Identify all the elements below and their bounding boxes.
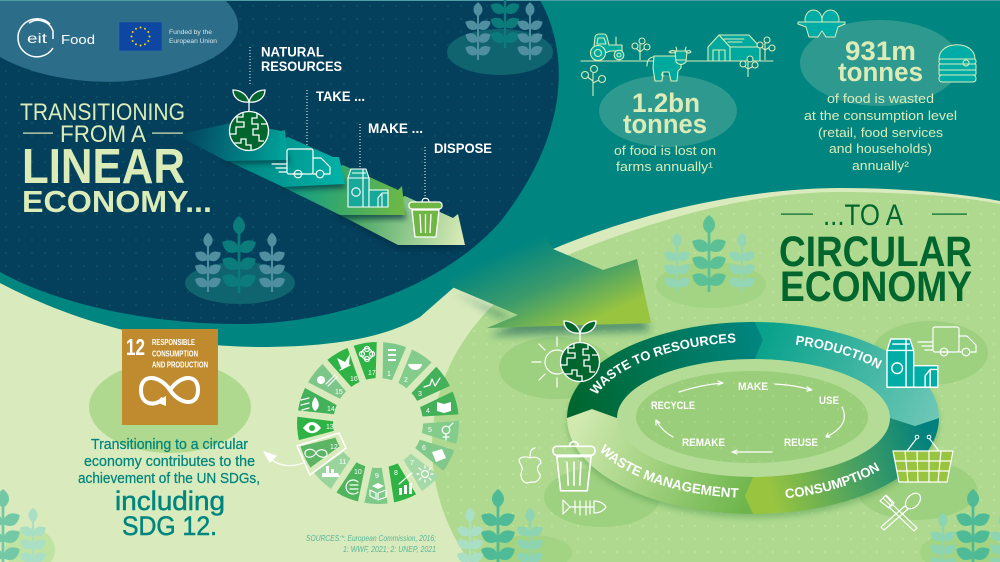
segment 3 — [283, 165, 407, 219]
logo: EIT Food: Food — [61, 33, 95, 47]
stat: 1.2bn tonnes: of food is lost on — [614, 143, 716, 158]
text: sources: 1: WWF, 2021; 2: UNEP, 2021 — [343, 544, 436, 554]
icon: basket — [893, 435, 953, 482]
wedge 11: 11 — [339, 459, 346, 466]
label: consumption: CONSUMPTION — [786, 462, 880, 498]
wedge 10 — [336, 460, 372, 502]
icon: fork and spoon — [880, 490, 923, 531]
tractor — [590, 34, 624, 60]
labels: natural resources, take, make, dispose — [261, 44, 492, 156]
wedge 11 — [314, 447, 356, 490]
stat: 931m tonnes: at the consumption level — [804, 108, 957, 123]
plants: bottom left — [0, 489, 55, 562]
wedge 3 — [408, 366, 451, 406]
logo: EU flag — [119, 22, 162, 51]
wedge 13: 13 — [326, 424, 334, 431]
wedge 7: 7 — [410, 460, 414, 467]
title: transitioning from a linear economy: TRANSITIONING — [20, 99, 185, 126]
wedge 5 — [421, 417, 460, 444]
stat: 931m tonnes: (retail, food services — [818, 125, 944, 140]
inner labels: make use reuse remake recycle: REUSE — [784, 437, 818, 449]
text: SDG contribution statement: economy contributes to the — [84, 454, 255, 470]
wedge 8: 8 — [394, 470, 398, 477]
background: light green field — [0, 188, 1000, 562]
wedge 14 — [297, 388, 339, 421]
stat: 1.2bn tonnes: 1.2bn — [632, 88, 700, 118]
inner labels: make use reuse remake recycle: MAKE — [738, 381, 768, 393]
text: sources: SOURCES:*: European Commission, 2016; — [306, 533, 437, 543]
wedge 9: 9 — [375, 473, 379, 480]
icon: farm scene — [581, 34, 775, 96]
stat: 1.2bn tonnes: farms annually¹ — [616, 159, 714, 174]
arrow: large transition arrow — [445, 225, 651, 336]
stat: 1.2bn tonnes: tonnes — [623, 109, 707, 139]
stat: 1.2bn tonnes — [614, 88, 716, 174]
ring centre — [616, 359, 890, 477]
plants: bottom right — [920, 489, 1000, 562]
SDG 12 tile: AND PRODUCTION — [152, 360, 208, 370]
segment: waste to resources — [567, 322, 763, 418]
text: sources — [306, 533, 437, 554]
barn — [708, 35, 760, 61]
stat: 931m tonnes: and households) — [829, 141, 932, 156]
segment: consumption — [745, 418, 939, 514]
inner labels: make use reuse remake recycle: RECYCLE — [651, 400, 695, 412]
labels: natural resources, take, make, dispose: RESOURCES — [261, 59, 342, 74]
dotted leader lines — [250, 47, 425, 196]
text: funded by the EU — [169, 29, 217, 45]
icon: globe with sprout, ring — [560, 321, 600, 382]
text: funded by the EU: Funded by the — [169, 29, 212, 36]
icon: truck, ring — [918, 327, 976, 356]
stat: 931m tonnes: 931m — [845, 36, 916, 66]
wedge 10: 10 — [354, 469, 362, 476]
icon: burger — [939, 45, 976, 82]
title: transitioning from a linear economy: LINEAR — [22, 140, 185, 194]
wedge 16: 16 — [350, 376, 358, 383]
logo: EIT Food: eit — [27, 30, 47, 46]
labels: natural resources, take, make, dispose: MAKE ... — [368, 121, 423, 136]
segment: production — [755, 322, 939, 426]
labels: natural resources, take, make, dispose: DISPOSE — [434, 141, 492, 156]
wedge 4: 4 — [426, 408, 430, 415]
plants: top of navy circle — [447, 0, 553, 75]
SDG 12 tile: 12 — [126, 334, 145, 360]
plants: bottom centre — [478, 489, 572, 562]
SDG 12 tile: RESPONSIBLE — [152, 337, 195, 347]
icon: globe with sprout — [230, 90, 268, 150]
plants: behind circular economy title — [656, 215, 766, 308]
stat: 931m tonnes: of food is wasted — [827, 91, 934, 106]
ring shadow — [567, 326, 939, 518]
plants: bottom of wheel — [455, 508, 485, 562]
wedge 13 — [296, 414, 334, 440]
wedge 12 highlighted: 12 — [330, 444, 338, 451]
icon: milk carton — [348, 169, 388, 207]
SDG 12 tile: CONSUMPTION — [152, 348, 198, 358]
stat ellipse: 931m — [800, 20, 960, 106]
wedge 9 — [364, 467, 389, 504]
wedge 4 — [418, 391, 459, 423]
title: to a circular economy: ...TO A — [823, 199, 903, 232]
label: production: PRODUCTION — [796, 336, 882, 369]
label: waste management: WASTE MANAGEMENT — [600, 444, 739, 498]
title: transitioning from a linear economy: ECONOMY... — [22, 184, 212, 219]
SDG 12 ellipse — [89, 361, 251, 453]
text: SDG contribution statement: including — [115, 486, 225, 516]
wedge 17: 17 — [368, 370, 376, 377]
wedge 5: 5 — [428, 427, 432, 434]
wedge 15: 15 — [335, 389, 343, 396]
icon ellipses around the ring — [499, 321, 988, 527]
diagram: circular economy ring — [564, 322, 942, 520]
wedge 7 — [398, 449, 440, 492]
wedge 6 — [412, 434, 455, 471]
icon: bin — [409, 198, 442, 237]
wedge 15 — [307, 363, 350, 404]
chart: SDG wheel — [296, 341, 460, 504]
arrow: from SDG 12 wedge to text — [264, 452, 303, 466]
labels: natural resources, take, make, dispose: TAKE ... — [316, 89, 365, 104]
labels: natural resources, take, make, dispose: NATURAL — [261, 44, 324, 60]
title: transitioning from a linear economy: FROM A — [60, 121, 146, 148]
title: transitioning from a linear economy — [20, 99, 212, 219]
wedge 2: 2 — [404, 377, 408, 384]
icon: bin, ring — [553, 442, 595, 491]
cow — [647, 47, 691, 81]
icon: truck — [272, 149, 330, 178]
inner labels: make use reuse remake recycle: USE — [819, 395, 839, 407]
wedge 1: 1 — [387, 371, 391, 378]
icon: fish bone — [563, 500, 606, 515]
text: SDG contribution statement: Transitioning to a circular — [91, 437, 248, 453]
icon: apple core — [519, 448, 541, 483]
wedge 1 — [376, 341, 406, 382]
panel: linear economy navy circle — [0, 0, 559, 324]
inner labels: make use reuse remake recycle: REMAKE — [682, 437, 725, 449]
segment: waste management — [567, 409, 753, 514]
icon: eggs — [798, 10, 845, 37]
segment 1 — [177, 122, 290, 164]
logo: EIT Food — [18, 19, 95, 57]
stat: 931m tonnes: annually² — [852, 158, 910, 173]
inner labels: make use reuse remake recycle — [651, 381, 839, 449]
plants: bottom of navy circle — [185, 216, 295, 304]
text: funded by the EU: European Union — [169, 38, 217, 45]
wedge 16 — [327, 347, 365, 390]
wedge 3: 3 — [418, 391, 422, 398]
title: to a circular economy: CIRCULAR — [779, 228, 972, 276]
wedge 2 — [393, 349, 432, 392]
text: SDG contribution statement — [78, 437, 260, 541]
background: circular economy green area — [432, 192, 1000, 562]
title: to a circular economy — [779, 199, 972, 311]
label: waste to resources: WASTE TO RESOURCES — [589, 334, 736, 394]
text: SDG contribution statement: achievement of the UN SDGs, — [78, 471, 260, 487]
icon: sun — [532, 337, 569, 387]
segment 4 — [340, 196, 467, 249]
text: SDG contribution statement: SDG 12. — [122, 511, 217, 541]
wedge 12 highlighted — [297, 431, 346, 475]
wedge 17 — [354, 341, 382, 381]
stat: 931m tonnes: tonnes — [838, 57, 923, 87]
logo panel ellipse — [0, 0, 238, 82]
arrow: linear economy flow — [177, 122, 467, 249]
segment 2 — [226, 137, 347, 190]
stat: 931m tonnes — [804, 36, 957, 173]
stat ellipse: 1.2bn — [599, 75, 737, 147]
trees — [582, 37, 775, 96]
wedge 14: 14 — [327, 406, 335, 413]
wedge 6: 6 — [422, 445, 426, 452]
icon: carton, ring — [887, 339, 938, 387]
SDG 12 tile — [122, 329, 218, 425]
title: to a circular economy: ECONOMY — [780, 263, 972, 311]
inner arrows — [656, 381, 844, 454]
wedge 8 — [382, 461, 416, 503]
